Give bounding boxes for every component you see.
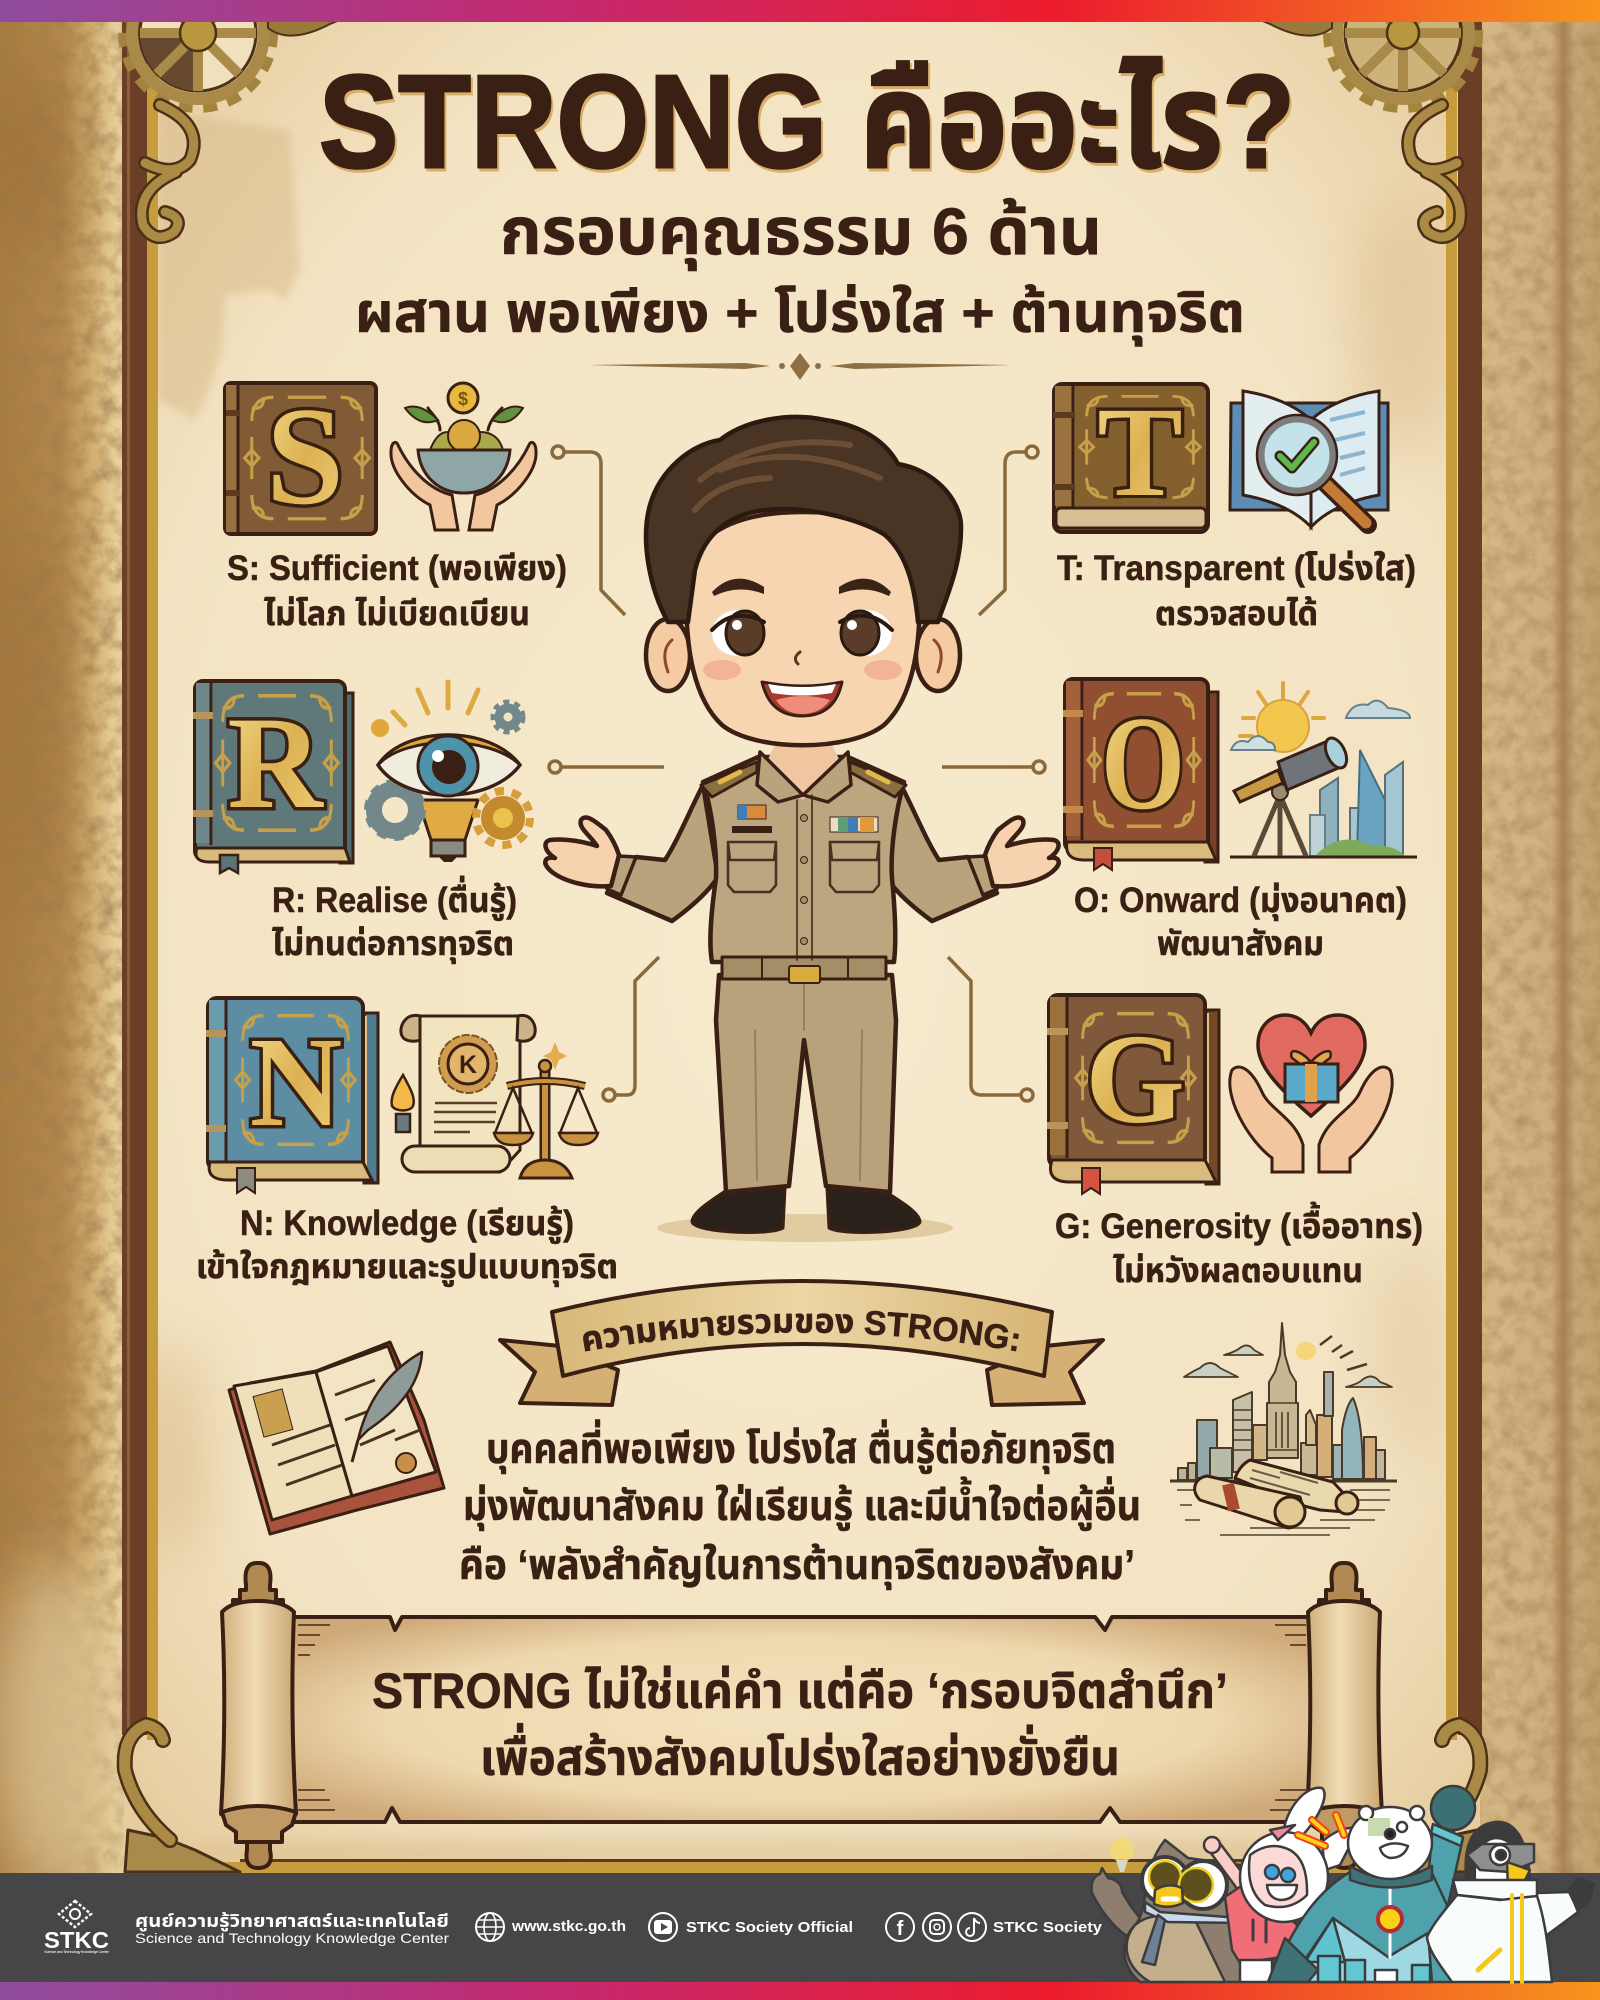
label R: ไม่ทนต่อการทุจริต xyxy=(272,925,514,964)
label G xyxy=(1055,1201,1423,1290)
ornament: top-right gear xyxy=(1333,0,1473,103)
scroll text: เพื่อสร้างสังคมโปร่งใสอย่างยั่งยืน xyxy=(480,1723,1120,1786)
connector G xyxy=(948,957,1033,1101)
badges and ribbons xyxy=(732,805,878,833)
social icons: STKC Society xyxy=(993,1919,1103,1936)
hair xyxy=(646,417,961,622)
social icons xyxy=(886,1913,1103,1941)
subtitle line 2: ผสาน พอเพียง + โปร่งใส + ต้านทุจริต xyxy=(355,281,1245,347)
scroll right roller xyxy=(1307,1563,1382,1868)
label R xyxy=(272,875,517,964)
connector O xyxy=(942,761,1045,773)
label T: ตรวจสอบได้ xyxy=(1155,595,1318,633)
eyebrows xyxy=(712,579,891,596)
body paragraph xyxy=(459,1419,1141,1590)
label O xyxy=(1074,881,1407,963)
item G: Generosity xyxy=(1047,995,1423,1290)
bottom gradient bar xyxy=(0,1982,1600,2000)
mascot: pink rabbit xyxy=(1204,1788,1358,1982)
right arm xyxy=(886,785,1059,921)
banner heading xyxy=(498,1279,1106,1407)
mascot: polar bear robot xyxy=(1268,1786,1475,1982)
nose xyxy=(795,652,800,664)
label G: ไม่หวังผลตอบแทน xyxy=(1113,1252,1363,1290)
shoes xyxy=(692,1188,920,1233)
label T: T: Transparent (โปร่งใส) xyxy=(1057,549,1416,588)
book N: N xyxy=(250,1011,342,1153)
STKC logo xyxy=(44,1901,110,1954)
ribbon right tail xyxy=(987,1340,1103,1405)
divider ornament xyxy=(588,353,1012,380)
bottom scroll xyxy=(221,1563,1382,1868)
icon: telescope, sun and city xyxy=(1230,683,1417,857)
label N: N: Knowledge (เรียนรู้) xyxy=(240,1204,574,1244)
placket and buttons xyxy=(797,795,812,960)
body paragraph: มุ่งพัฒนาสังคม ใฝ่เรียนรู้ และมีน้ำใจต่อผู้อื่น xyxy=(463,1476,1141,1531)
character shadow xyxy=(657,1214,953,1242)
right aged parchment strip xyxy=(1478,0,1600,1880)
ornament: bottom-left flourish xyxy=(125,1725,240,1872)
label S xyxy=(227,549,567,633)
book S: S xyxy=(266,379,344,534)
item S: Sufficient xyxy=(225,379,567,633)
icon: open book with quill xyxy=(229,1342,444,1534)
label T xyxy=(1057,549,1416,633)
subtitle line 1: กรอบคุณธรรม 6 ด้าน xyxy=(500,194,1102,271)
label O: O: Onward (มุ่งอนาคต) xyxy=(1074,881,1407,921)
label N xyxy=(196,1204,618,1287)
label G: G: Generosity (เอื้ออาทร) xyxy=(1055,1201,1423,1246)
book R xyxy=(193,681,353,873)
icon: hands holding bowl with coin: $ xyxy=(458,389,468,409)
centre name xyxy=(135,1911,449,1946)
belt and buckle xyxy=(722,957,886,983)
icon: city and rolled scrolls xyxy=(1170,1323,1397,1535)
icon: scroll, candle and scales: K xyxy=(459,1051,477,1079)
epaulettes xyxy=(701,762,906,797)
book G xyxy=(1047,995,1219,1194)
centre name: ศูนย์ความรู้วิทยาศาสตร์และเทคโนโลยี xyxy=(135,1911,449,1932)
connector T xyxy=(979,446,1038,615)
head face xyxy=(687,512,919,745)
youtube: STKC Society Official xyxy=(686,1919,853,1936)
top gradient bar xyxy=(0,0,1600,22)
connector S xyxy=(552,446,625,615)
scroll text: STRONG ไม่ใช่แค่คำ แต่คือ ‘กรอบจิตสำนึก’ xyxy=(372,1663,1228,1719)
icon: eye, bulb and gears xyxy=(368,682,530,862)
ornament: top-right corner scroll xyxy=(1260,20,1332,36)
connector N xyxy=(603,957,659,1101)
title: STRONG คืออะไร? xyxy=(319,48,1295,195)
item O: Onward xyxy=(1063,679,1417,963)
footer dark background xyxy=(0,1873,1600,1982)
connector R xyxy=(549,761,664,773)
item T: Transparent xyxy=(1053,381,1416,633)
icon: heart, gift and hands xyxy=(1230,1015,1392,1172)
centre name: Science and Technology Knowledge Center xyxy=(135,1930,449,1946)
body paragraph: บุคคลที่พอเพียง โปร่งใส ตื่นรู้ต่อภัยทุจริต xyxy=(486,1419,1116,1474)
frame: wood and gold border xyxy=(122,20,1482,1873)
mouth xyxy=(762,682,842,716)
ribbon centre xyxy=(552,1281,1052,1376)
ears xyxy=(646,619,960,691)
trousers xyxy=(716,975,896,1192)
scroll left roller xyxy=(221,1563,296,1868)
torso shirt xyxy=(703,757,904,962)
body paragraph: คือ ‘พลังสำคัญในการต้านทุจริตของสังคม’ xyxy=(459,1541,1135,1590)
scroll shading hatch xyxy=(298,1625,1306,1810)
neck xyxy=(765,745,842,800)
ornament: right flourish xyxy=(1408,105,1460,237)
book T xyxy=(1053,381,1208,532)
STKC logo: STKC xyxy=(44,1927,109,1953)
shirt pockets xyxy=(728,842,879,892)
icon: open book and magnifier xyxy=(1230,391,1388,527)
ornament: top-left gear xyxy=(128,0,268,103)
book N xyxy=(206,998,378,1193)
light bulb glow xyxy=(1110,1838,1134,1872)
mascot: penguin in lab coat xyxy=(1427,1822,1594,1982)
website: www.stkc.go.th xyxy=(511,1918,626,1935)
left aged parchment strip xyxy=(0,0,130,1900)
item N: Knowledge xyxy=(196,998,618,1287)
book S xyxy=(225,379,376,534)
book O: O xyxy=(1101,689,1185,837)
ribbon left tail xyxy=(500,1340,618,1405)
collar xyxy=(757,752,851,802)
social icons: f xyxy=(897,1918,904,1940)
icon: hands holding bowl with coin xyxy=(391,383,536,530)
icon: scroll, candle and scales xyxy=(392,1015,598,1178)
ornament: left flourish xyxy=(142,105,194,237)
parchment centre panel xyxy=(124,20,1480,1875)
item R: Realise xyxy=(193,681,530,964)
book G: G xyxy=(1085,1008,1185,1150)
blush xyxy=(703,660,902,680)
STKC logo: Science and Technology Knowledge Center xyxy=(44,1949,110,1954)
left arm xyxy=(545,785,718,921)
label S: S: Sufficient (พอเพียง) xyxy=(227,549,567,588)
scroll parchment sheet xyxy=(290,1617,1312,1822)
ornament: top-left corner scroll xyxy=(268,20,340,36)
book R: R xyxy=(227,689,324,836)
label O: พัฒนาสังคม xyxy=(1157,925,1324,963)
book O xyxy=(1063,679,1218,870)
youtube xyxy=(649,1913,853,1941)
label S: ไม่โลภ ไม่เบียดเบียน xyxy=(264,595,530,633)
book T: T xyxy=(1097,381,1183,523)
eyes xyxy=(712,610,892,656)
scroll text xyxy=(372,1663,1228,1786)
label N: เข้าใจกฎหมายและรูปแบบทุจริต xyxy=(196,1248,618,1287)
label R: R: Realise (ตื่นรู้) xyxy=(272,875,517,921)
ornament: bottom-right flourish xyxy=(1365,1725,1480,1872)
website xyxy=(476,1913,626,1941)
central character in uniform xyxy=(545,417,1059,1242)
mascot: owl xyxy=(1092,1840,1243,1982)
footer band xyxy=(0,1873,1600,2000)
mascots group xyxy=(1092,1786,1594,1982)
banner text: ความหมายรวมของ STRONG: xyxy=(583,1310,1019,1352)
